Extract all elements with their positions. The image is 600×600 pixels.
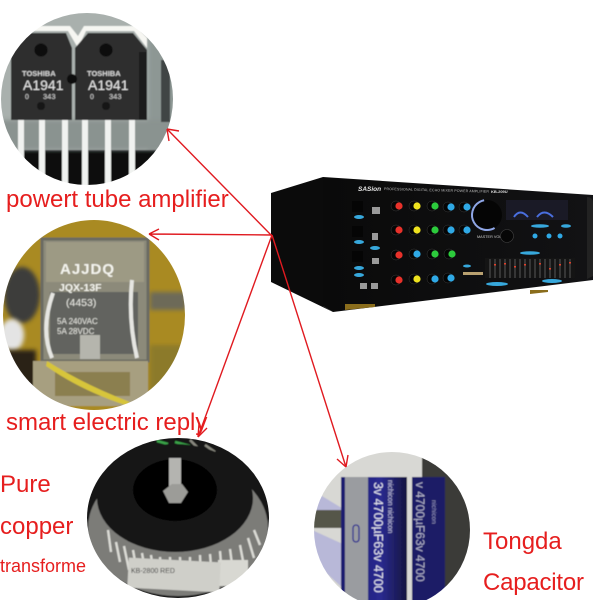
- label: Tongda Capacitor: Capacitor: [483, 569, 584, 596]
- photo circle: power tubes: 343: [109, 92, 122, 101]
- arrow: to capacitors: [272, 235, 348, 467]
- photo circle: power tubes: A1941: [88, 77, 129, 93]
- photo circle: relay: 5A 240VAC: [57, 317, 98, 326]
- photo circle: capacitors: nichicon: [430, 500, 437, 524]
- photo circle: relay: (4453): [66, 297, 96, 309]
- tone knobs: [532, 234, 562, 238]
- label: powert tube amplifier: powert tube amplifier: [6, 186, 229, 213]
- graphic equalizer: [485, 258, 575, 278]
- photo circle: capacitors: [312, 450, 472, 600]
- arrow: to transformer: [198, 235, 272, 437]
- arrow: to power tubes: [167, 129, 272, 236]
- photo circle: power tubes: TOSHIBA: [22, 69, 56, 78]
- label: pure copper transforme: copper: [0, 513, 73, 540]
- small volume knob: [500, 230, 514, 242]
- photo circle: relay: [0, 218, 190, 413]
- label: Tongda Capacitor: Tongda: [483, 528, 562, 555]
- label: pure copper transforme: transforme: [0, 556, 86, 576]
- label: pure copper transforme: [0, 471, 86, 576]
- photo circle: capacitors: v 4700µF63v 4700: [413, 482, 427, 582]
- photo circle: power tubes: 343: [43, 92, 56, 101]
- photo circle: power tubes: TOSHIBA: [87, 69, 121, 78]
- photo circle: toroidal transformer: KB-2800 RED: [131, 568, 175, 575]
- photo circle: power tubes: [0, 10, 178, 190]
- photo circle: power tubes: A1941: [23, 77, 64, 93]
- photo circle: power tubes: 0: [25, 94, 29, 101]
- photo circle: toroidal transformer: [85, 436, 271, 600]
- photo circle: relay: JQX-13F: [59, 282, 102, 294]
- knobs: red: [395, 202, 403, 284]
- knob bodies: [391, 201, 469, 285]
- photo circle: capacitors: 3v 4700µF63v 4700: [371, 482, 385, 593]
- amplifier: PROFESSIONAL DIGITAL ECHO MIXER POWER AMPLIFIER: [384, 187, 489, 194]
- label: pure copper transforme: Pure: [0, 471, 51, 498]
- label: Tongda Capacitor: [483, 528, 584, 596]
- master volume: [467, 195, 507, 239]
- photo circle: power tubes: 0: [90, 94, 94, 101]
- label: smart electric reply: smart electric reply: [6, 409, 207, 436]
- USB player strip: [463, 272, 483, 275]
- photo circle: relay: AJJDQ: [60, 261, 115, 278]
- knobs: yellow: [413, 202, 421, 283]
- master volume: MASTER VOL: [477, 235, 501, 239]
- amplifier: [271, 177, 593, 312]
- arrow: to relay: [149, 229, 272, 240]
- photo circle: relay: 5A 28VDC: [57, 327, 95, 336]
- knobs: blue: [413, 203, 471, 283]
- knobs: green: [431, 202, 456, 258]
- VU display: [506, 200, 568, 220]
- photo circle: capacitors: nichicon nichicon: [386, 480, 393, 533]
- amplifier: SASion: [358, 186, 381, 193]
- amplifier: KB-209U: [491, 189, 508, 194]
